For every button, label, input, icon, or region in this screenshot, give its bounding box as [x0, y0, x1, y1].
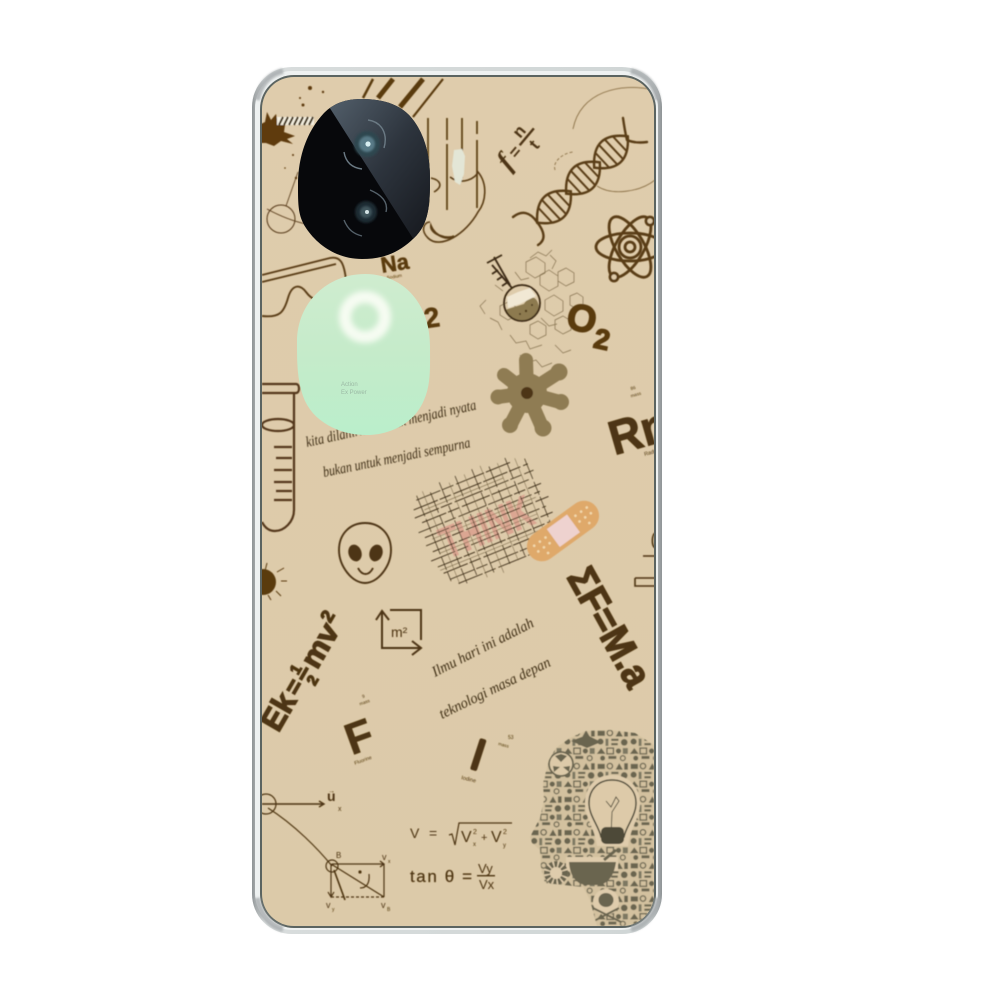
fluorine F label: mass — [359, 698, 371, 706]
mint green flash module: Ex Power — [341, 390, 367, 396]
projectile motion diagram: → — [328, 788, 335, 795]
iodine I label: Iodine — [461, 775, 477, 785]
frequency formula: f — [490, 147, 522, 176]
radon Rn label: Rn — [603, 398, 675, 466]
projectile motion diagram: x — [388, 859, 391, 865]
atom symbol — [594, 214, 654, 284]
partial beaker icon at right edge — [635, 533, 655, 586]
kinetic energy equation: mv — [295, 617, 346, 674]
goggles outline — [262, 258, 346, 316]
camera module — [298, 90, 440, 259]
frequency formula: = — [505, 142, 526, 162]
fluorine F label: F — [338, 710, 380, 765]
handwritten quote bottom: Ilmu hari ini adalah — [429, 615, 537, 681]
small sun icon — [262, 562, 288, 601]
tangent formula: tan θ = — [410, 867, 472, 886]
projectile motion diagram: u — [327, 788, 336, 804]
alien face — [339, 523, 391, 583]
lower lens — [344, 190, 386, 236]
kinetic energy equation: 1 — [287, 662, 306, 677]
handwritten quote top: bukan untuk menjadi sempurna — [322, 435, 472, 481]
hatched patch with pink lettering: THINK — [433, 487, 540, 568]
ink splash and pendulum — [260, 86, 324, 233]
kinetic energy equation: 2 — [304, 673, 322, 688]
DNA helix — [513, 118, 647, 245]
mint green flash module — [297, 274, 430, 435]
velocity formula — [410, 823, 512, 849]
radon Rn label — [607, 386, 654, 456]
sodium Na label: Sodium — [386, 273, 403, 280]
vertical lines and brain outline — [424, 118, 485, 242]
force equation: ΣF=M.a — [558, 560, 660, 696]
skull icon — [592, 889, 621, 922]
sodium Na label: Na — [379, 249, 411, 278]
lightbulb icon — [585, 775, 640, 846]
kinetic energy equation: 2 — [316, 607, 339, 626]
handwritten quote bottom — [429, 615, 553, 723]
handwritten quote top: kita dilahirkan untuk menjadi nyata — [304, 398, 478, 451]
diagonal beams at top — [363, 79, 443, 117]
mortar and pestle icon — [566, 850, 618, 885]
velocity formula: + — [481, 832, 487, 844]
area square m2 icon — [376, 610, 421, 655]
hatched patch with pink lettering — [413, 457, 554, 584]
radon Rn label: 86 — [630, 385, 637, 391]
partly hidden number 2: 2 — [422, 301, 442, 334]
velocity formula: V — [461, 829, 472, 846]
gear icon — [544, 861, 568, 885]
oxygen O2 label: O — [563, 296, 601, 343]
case back panel — [262, 77, 654, 926]
projectile motion diagram: v — [381, 900, 386, 910]
iodine I label: 53 — [508, 735, 514, 741]
velocity formula: 2 — [503, 829, 507, 836]
velocity formula: x — [473, 842, 476, 848]
tangent formula: Vx — [479, 877, 495, 892]
tangent formula — [409, 863, 496, 890]
iodine I label — [461, 735, 514, 785]
area square m2 icon: m² — [391, 624, 408, 640]
projectile motion diagram: v — [326, 900, 331, 910]
upper lens — [344, 120, 385, 169]
handwritten quote bottom: teknologi masa depan — [437, 655, 553, 723]
oxygen O2 label — [567, 303, 611, 352]
projectile motion diagram: v — [382, 852, 387, 862]
velocity formula: 2 — [473, 829, 477, 836]
science doodles — [250, 79, 675, 930]
radon Rn label: Radon — [644, 448, 661, 458]
transparent corner bumpers — [257, 71, 658, 929]
circle sketch behind DNA — [555, 87, 655, 192]
projectile motion diagram: B — [387, 907, 391, 913]
velocity formula: y — [503, 843, 506, 849]
frequency formula — [498, 126, 540, 176]
radiation icon — [549, 752, 573, 776]
tangent formula: Vy — [478, 861, 493, 876]
projectile motion diagram: y — [332, 907, 335, 913]
oxygen O2 label: 2 — [591, 323, 613, 356]
projectile motion diagram — [256, 788, 391, 913]
radon Rn label: mass — [630, 390, 642, 398]
bacteria splat — [490, 360, 569, 436]
phone case frame — [252, 67, 662, 934]
projectile motion diagram: B — [336, 851, 341, 860]
graduation cap icon — [571, 735, 601, 748]
fluorine F label — [343, 694, 372, 766]
fluorine F label: Fluorine — [354, 755, 373, 767]
crystal highlight — [452, 149, 465, 185]
handwritten quote top — [305, 402, 477, 478]
iodine I label: mass — [498, 741, 510, 749]
velocity formula: = — [429, 825, 437, 841]
flask with molecule structure — [480, 250, 583, 367]
fluorine F label: 9 — [361, 693, 366, 699]
head silhouette made of icons — [530, 730, 654, 926]
test tube — [262, 384, 299, 531]
projectile motion diagram: x — [338, 806, 342, 813]
bandage — [526, 500, 600, 562]
phone case product illustration — [252, 67, 662, 934]
kinetic energy equation — [262, 609, 338, 733]
mint green flash module: Action — [341, 382, 358, 388]
frequency formula: t — [525, 136, 544, 153]
frequency formula: n — [509, 121, 530, 142]
kinetic energy equation: = — [279, 674, 309, 700]
velocity formula: V — [410, 825, 420, 841]
velocity formula: V — [491, 829, 502, 846]
kinetic energy equation: Ek — [253, 686, 304, 737]
